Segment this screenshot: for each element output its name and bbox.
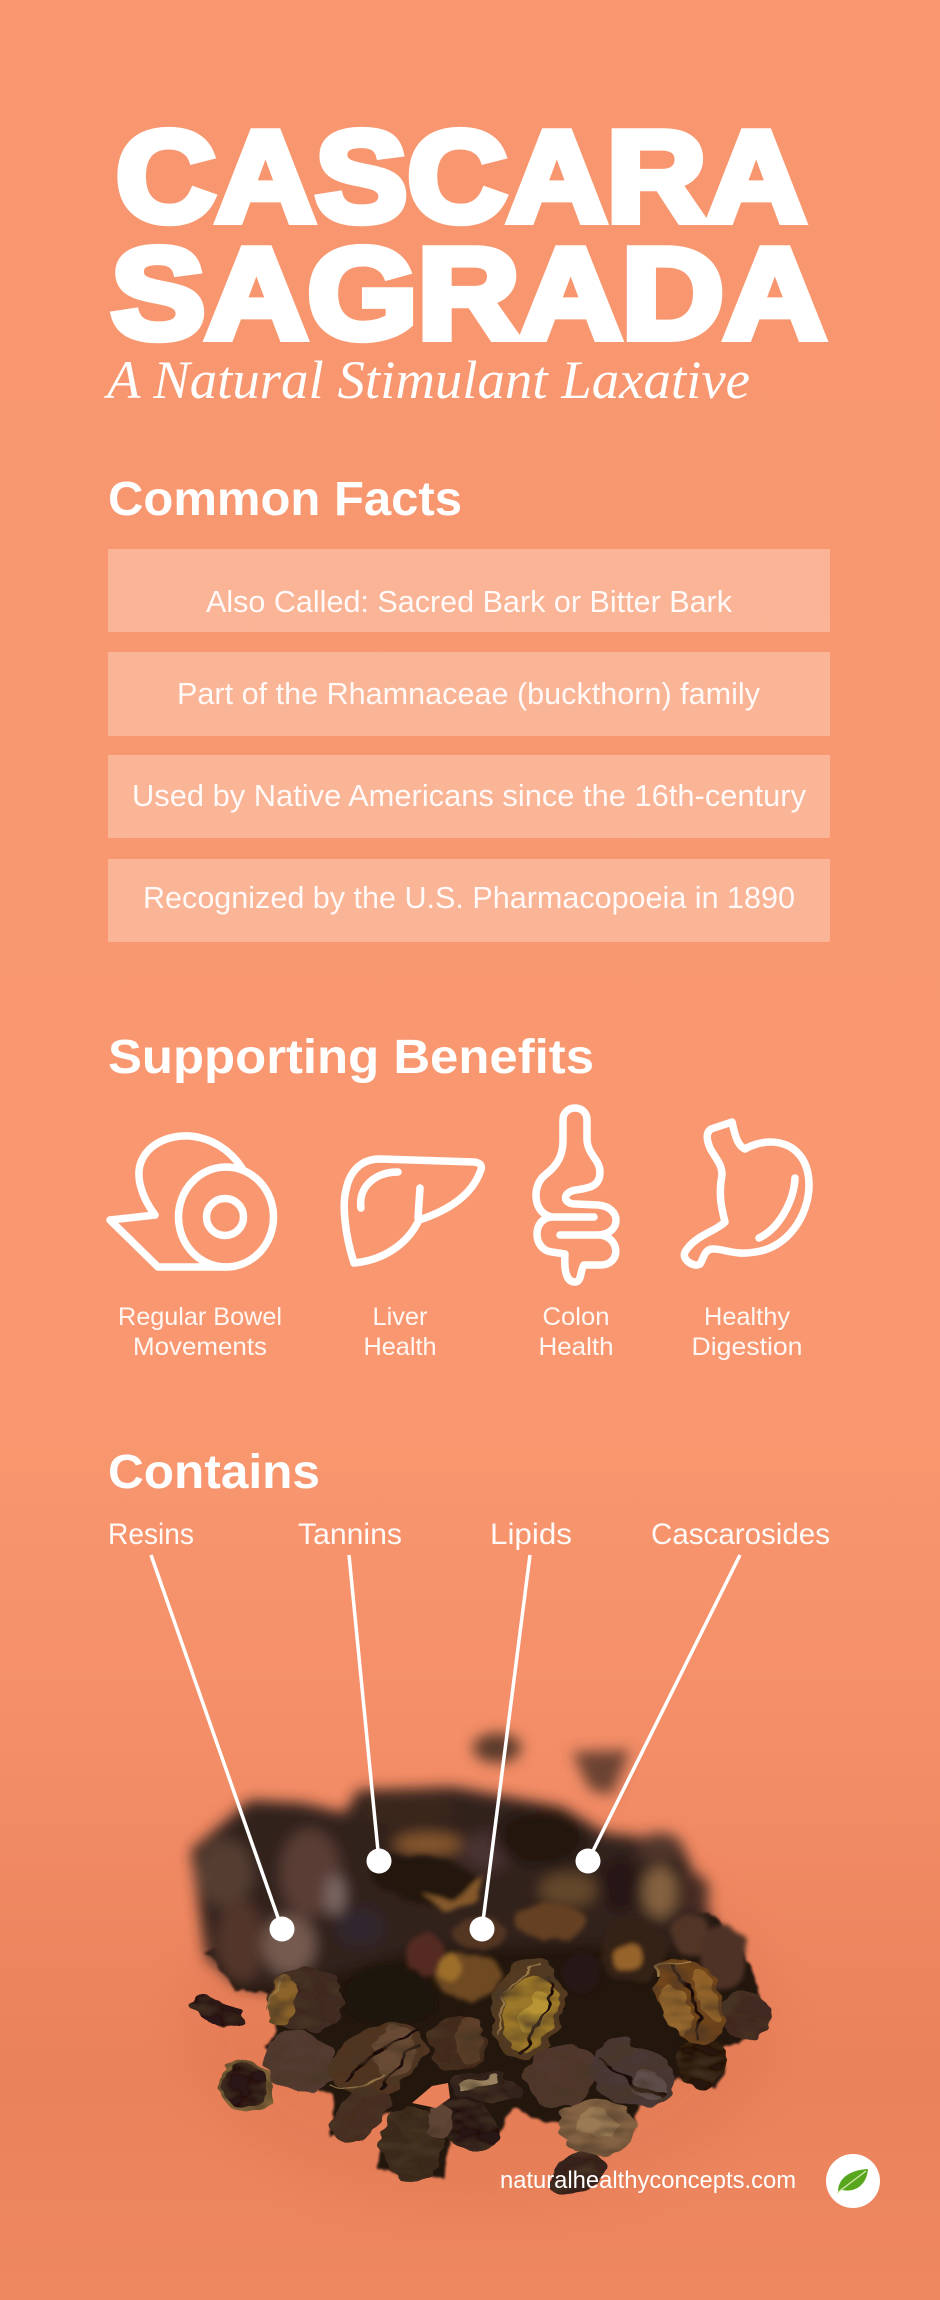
label: liver health	[364, 1303, 436, 1361]
fact: also called: Also Called: Sacred Bark or Bitter Bark	[206, 584, 732, 619]
callout: resins	[151, 1555, 294, 1942]
label: healthy digestion: Digestion	[692, 1333, 802, 1361]
heading: common facts: Common Facts	[108, 473, 462, 526]
callout: cascarosides	[576, 1555, 740, 1874]
footer url: naturalhealthyconcepts.com	[500, 2167, 796, 2194]
ingredient labels: Lipids	[490, 1518, 572, 1551]
fact: family: Part of the Rhamnaceae (buckthorn) family	[177, 676, 760, 711]
label: regular bowel movements: Movements	[133, 1333, 267, 1361]
fact: family	[108, 652, 830, 736]
heading: supporting benefits: Supporting Benefits	[108, 1031, 594, 1084]
ingredient labels: Tannins	[298, 1518, 402, 1551]
title: CASCARA	[116, 105, 806, 249]
label: regular bowel movements	[118, 1303, 282, 1361]
callout lines and dots	[151, 1555, 740, 1942]
ingredient labels	[108, 1518, 830, 1551]
label: healthy digestion: Healthy	[704, 1303, 791, 1331]
label: healthy digestion	[692, 1303, 802, 1361]
heading: contains: Contains	[108, 1446, 320, 1499]
callout: tannins	[349, 1555, 392, 1874]
ingredient labels: Cascarosides	[651, 1518, 830, 1551]
icon: toilet roll	[110, 1136, 274, 1267]
label: colon health: Health	[538, 1333, 614, 1361]
title: SAGRADA	[111, 222, 826, 366]
icon: liver	[344, 1159, 481, 1263]
icon: leaf logo	[826, 2154, 880, 2208]
panel: common facts	[108, 473, 830, 942]
icon: colon	[536, 1108, 616, 1282]
panel: supporting benefits	[108, 1031, 809, 1361]
label: regular bowel movements: Regular Bowel	[118, 1303, 282, 1331]
icon: stomach	[684, 1122, 809, 1265]
label: colon health	[538, 1303, 614, 1361]
label: colon health: Colon	[542, 1303, 610, 1331]
photo: pile of cascara bark	[180, 1733, 780, 2210]
title	[111, 105, 826, 366]
label: liver health: Health	[364, 1333, 436, 1361]
fact: native americans: Used by Native Americans since the 16th-century	[132, 778, 806, 813]
label: liver health: Liver	[372, 1303, 428, 1331]
ingredient labels: Resins	[108, 1518, 194, 1551]
callout: lipids	[470, 1555, 530, 1942]
fact: also called	[108, 549, 830, 632]
fact: pharmacopoeia	[108, 859, 830, 942]
fact: native americans	[108, 755, 830, 838]
subtitle: A Natural Stimulant Laxative	[104, 350, 750, 410]
fact: pharmacopoeia: Recognized by the U.S. Pharmacopoeia in 1890	[143, 880, 795, 915]
